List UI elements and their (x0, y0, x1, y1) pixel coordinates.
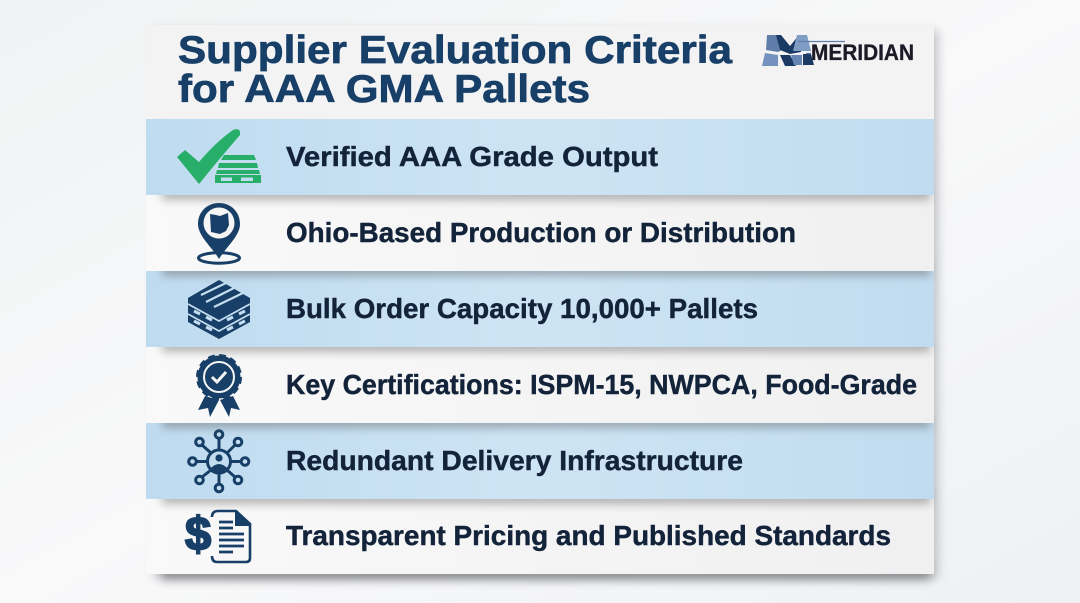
icon: certification badge (197, 355, 241, 417)
row label: Redundant Delivery Infrastructure (286, 445, 743, 476)
title: for AAA GMA Pallets (178, 68, 590, 111)
icon: stacked pallets (188, 280, 250, 339)
title: Supplier Evaluation Criteria (178, 29, 732, 72)
row label: Transparent Pricing and Published Standards (286, 520, 891, 551)
icon: price document: $ (185, 507, 211, 560)
row 4 (146, 347, 934, 428)
icon: network hub (189, 431, 249, 492)
row 6 (146, 499, 934, 580)
row label: Verified AAA Grade Output (286, 141, 658, 172)
row label: Ohio-Based Production or Distribution (286, 217, 796, 248)
row 5 (146, 423, 934, 504)
logo: Meridian: MERIDIAN (811, 40, 914, 65)
icon: Ohio location pin (198, 203, 240, 263)
row 2 (146, 195, 934, 276)
row 1 (146, 119, 934, 200)
row 3 (146, 271, 934, 352)
row label: Bulk Order Capacity 10,000+ Pallets (286, 293, 758, 324)
icon: check mark and pallet (177, 129, 261, 184)
logo: Meridian (762, 35, 914, 66)
panel: card background (146, 25, 938, 578)
title (178, 29, 732, 111)
icon: price document (185, 507, 251, 562)
row label: Key Certifications: ISPM-15, NWPCA, Food-Grade (286, 369, 917, 400)
